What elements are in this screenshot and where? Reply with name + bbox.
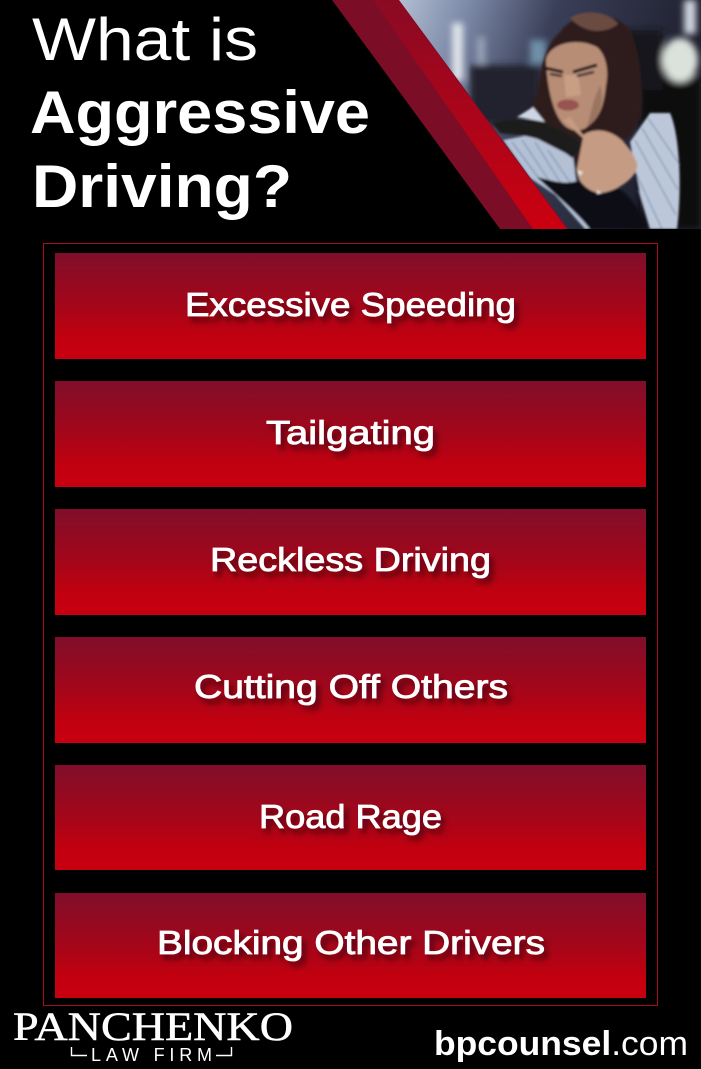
steering wheel — [492, 119, 582, 158]
banner: Excessive Speeding: Excessive Speeding — [185, 286, 516, 323]
website: bpcounsel.com — [434, 1025, 688, 1063]
shirt left and centre — [502, 134, 592, 229]
brows and eyes — [545, 65, 597, 72]
diagonal band: dark crimson — [332, 0, 568, 229]
banner: Road Rage — [55, 765, 646, 870]
banner: Tailgating — [55, 381, 646, 487]
diagonal band: red — [373, 0, 567, 229]
hair — [529, 15, 642, 175]
banner: Reckless Driving: Reckless Driving — [210, 541, 491, 578]
banner: Reckless Driving — [55, 509, 646, 615]
lips — [557, 100, 579, 110]
neck and face — [546, 42, 607, 131]
title: Driving? — [32, 153, 292, 220]
logo: Panchenko Law Firm — [13, 1004, 293, 1065]
title: Aggressive — [30, 79, 370, 146]
banner: Blocking Other Drivers — [55, 893, 646, 998]
title — [30, 6, 370, 220]
banner: Cutting Off Others — [55, 637, 646, 743]
title: What is — [32, 6, 258, 73]
banner: Excessive Speeding — [55, 253, 646, 359]
header photo: angry woman driving — [398, 0, 701, 229]
banner: Tailgating: Tailgating — [266, 414, 435, 451]
banner: Road Rage: Road Rage — [259, 798, 442, 835]
banner: Cutting Off Others: Cutting Off Others — [194, 668, 508, 705]
logo: Panchenko Law Firm: LAW FIRM — [91, 1045, 212, 1065]
banner: Blocking Other Drivers: Blocking Other Drivers — [157, 924, 545, 961]
logo: Panchenko Law Firm: PANCHENKO — [13, 1004, 293, 1049]
hand — [563, 117, 637, 193]
shirt right — [630, 113, 680, 229]
list panel frame — [44, 244, 658, 1006]
